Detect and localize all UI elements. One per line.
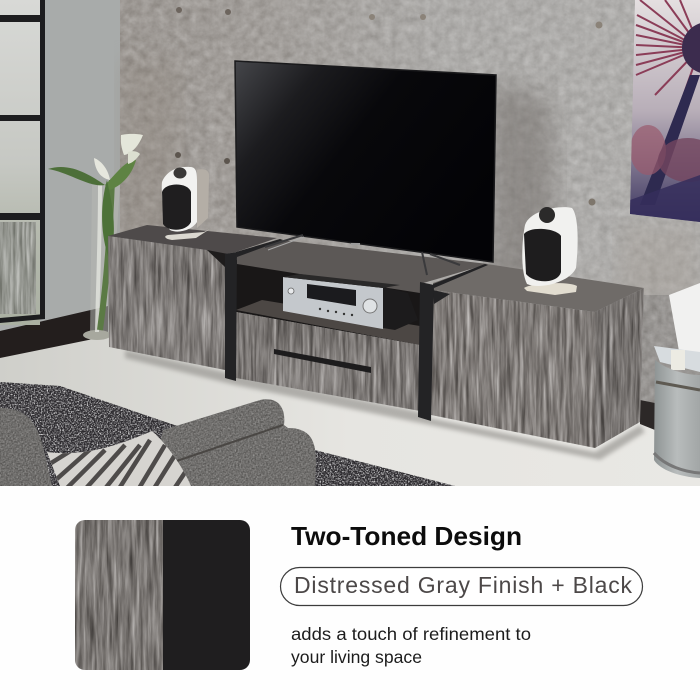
drawer front: [236, 312, 420, 411]
cabinet top: [433, 264, 644, 312]
window: [0, 0, 45, 325]
shelf opening: [236, 260, 420, 345]
striped pillow: [47, 431, 191, 486]
sofa back left: [0, 408, 52, 486]
left cabinet: [108, 225, 277, 370]
cabinet shadow on floor: [125, 350, 645, 460]
pill label: [280, 568, 642, 606]
description: adds a touch of refinement to: [291, 624, 531, 644]
lower shelf surface: [236, 300, 420, 345]
baseboard: [0, 306, 108, 358]
cabinet top: [108, 225, 277, 254]
right speaker: [522, 207, 578, 295]
center console: [236, 240, 488, 411]
background wall: gray plaster: [0, 0, 125, 345]
AV receiver: [283, 274, 418, 330]
heading: Two-Toned Design: [291, 521, 522, 551]
panel: caption area: [75, 520, 644, 670]
black frame bands: [225, 239, 488, 421]
top shelf: [237, 240, 488, 293]
gray wood swatch: [75, 520, 163, 670]
bucket and paper rolls: [654, 283, 700, 478]
black swatch: [163, 520, 250, 670]
plant in glass vase: [48, 134, 143, 340]
description: [291, 624, 531, 667]
sofa: [0, 399, 316, 495]
right baseboard: [640, 400, 660, 432]
floor: [0, 335, 700, 486]
drawer handle: [274, 349, 371, 373]
pill label: Distressed Gray Finish + Black: [294, 572, 632, 598]
panel: room photo: [0, 0, 700, 495]
TV: [235, 61, 496, 275]
picture on wall: [630, 0, 700, 222]
sofa arm: [150, 399, 316, 486]
concrete wall: [120, 0, 700, 460]
TV stand: [265, 235, 460, 275]
right cabinet: [431, 264, 644, 448]
left speaker: [162, 167, 210, 240]
cabinet front: [431, 290, 595, 448]
cabinet front: [108, 236, 225, 370]
cabinet side: [595, 288, 644, 448]
rug: [0, 382, 455, 486]
description: your living space: [291, 647, 422, 667]
swatch: gray and black finish: [75, 520, 250, 670]
